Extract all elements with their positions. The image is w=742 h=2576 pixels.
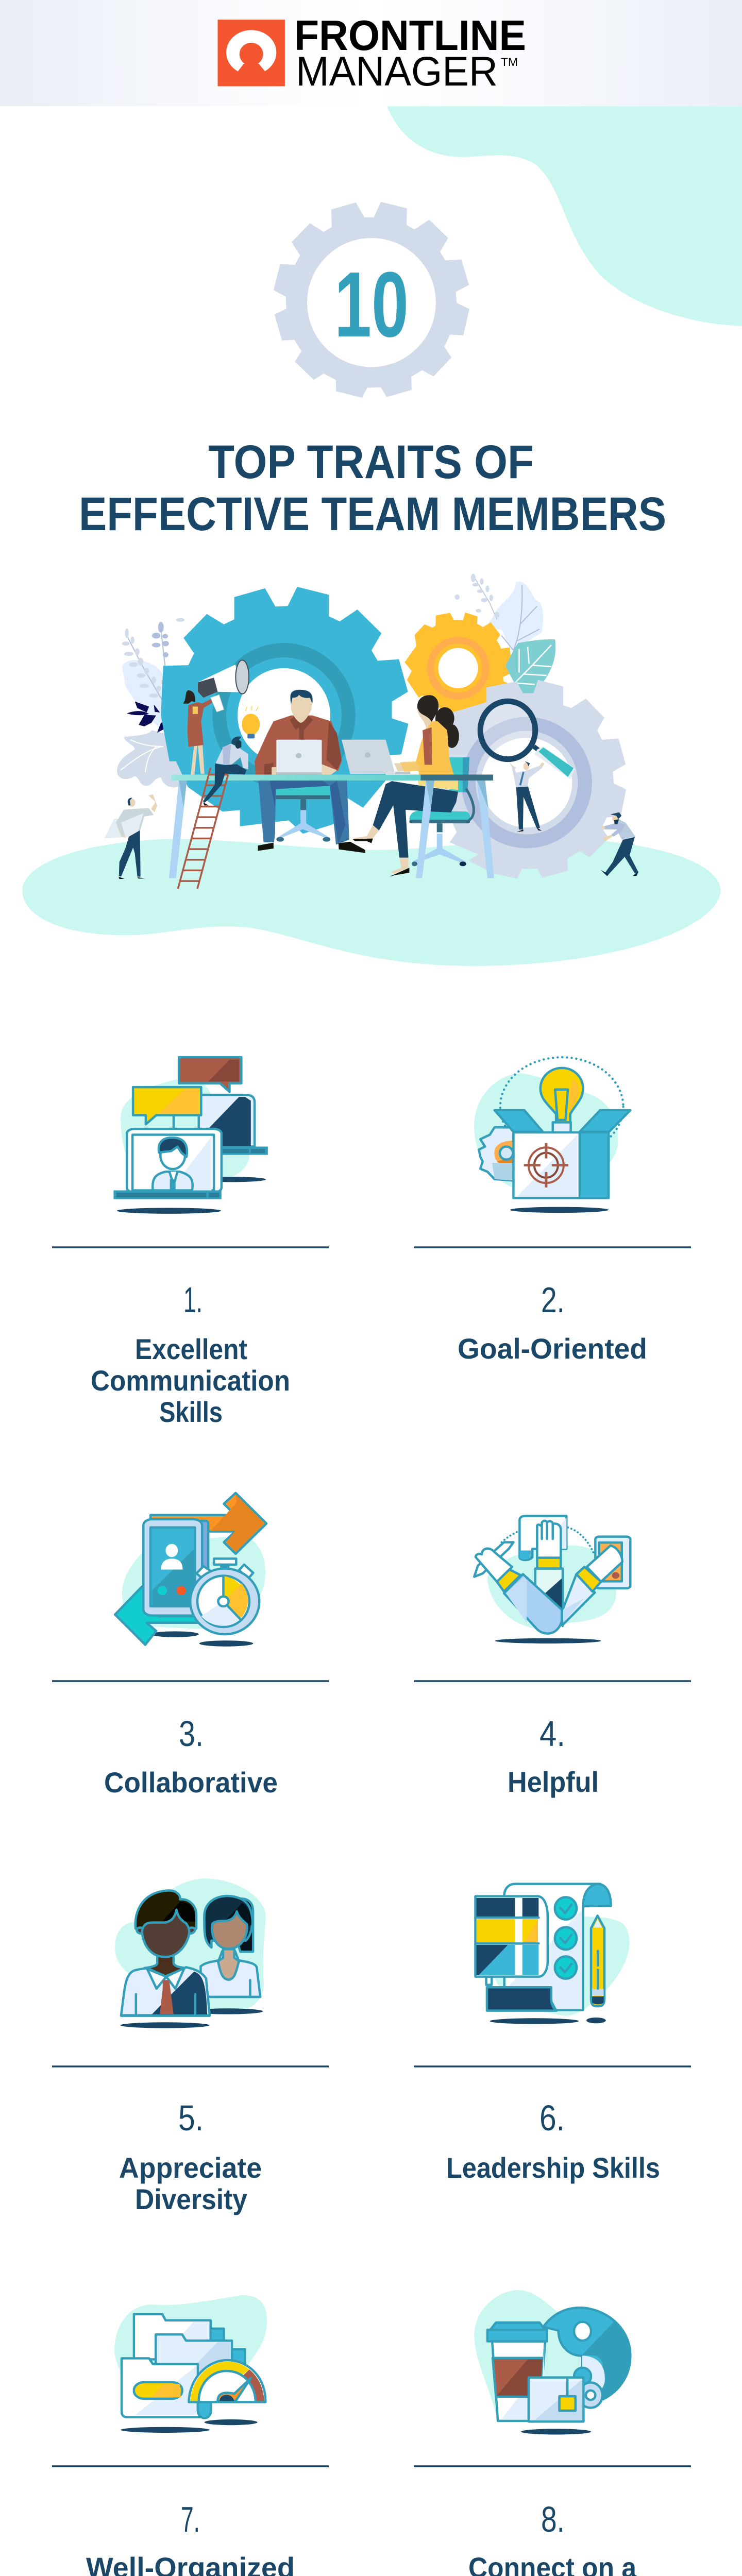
label: Helpful [508, 1766, 599, 1798]
divider [52, 1246, 329, 1248]
label [91, 1333, 290, 1428]
trait 4: helpful [414, 1516, 691, 1798]
number: 2. [541, 1280, 565, 1320]
header band with logo [0, 0, 742, 106]
desk [169, 774, 494, 878]
logo wordmark [294, 11, 526, 95]
icon: two colleagues [115, 1878, 266, 2028]
icon: coffee, mug and yin-yang [474, 2290, 630, 2434]
magnifying glass [480, 701, 575, 779]
number: 6. [539, 2098, 565, 2138]
icon: video call with speech bubbles [113, 1057, 268, 1214]
number: 4. [539, 1714, 565, 1754]
label [119, 2151, 262, 2215]
woman with megaphone [183, 690, 213, 774]
background blob: top right [387, 106, 742, 326]
divider [414, 1680, 691, 1682]
seated man [255, 690, 365, 853]
logo wordmark: FRONTLINE [294, 11, 526, 59]
label: Communication [91, 1364, 290, 1397]
trait 2: goal-oriented [414, 1057, 691, 1365]
trait 7: well-organized [52, 2295, 329, 2576]
blue gear [161, 587, 409, 834]
divider [414, 2465, 691, 2467]
gear badge with number 10 [274, 202, 469, 398]
divider [52, 2465, 329, 2467]
trait 6: leadership skills [414, 1884, 691, 2184]
title [79, 436, 666, 540]
label: Excellent [135, 1333, 247, 1365]
icon: phone, stopwatch and arrows [115, 1493, 266, 1647]
trait 3: collaborative [52, 1493, 329, 1799]
logo wordmark: TM [501, 56, 518, 69]
number: 5. [178, 2098, 204, 2138]
right foliage [455, 574, 543, 650]
number: 7. [181, 2499, 200, 2539]
trait 5: appreciate diversity [52, 1878, 329, 2215]
man's chair [276, 786, 330, 842]
laptops [276, 740, 410, 774]
icon: helping hands [474, 1516, 630, 1643]
divider [52, 2065, 329, 2067]
divider [52, 1680, 329, 1682]
divider [414, 1246, 691, 1248]
ground blob [22, 838, 721, 966]
number: 1. [183, 1280, 203, 1320]
label: Collaborative [104, 1766, 278, 1799]
light bulb [242, 706, 260, 738]
man with laptop, bottom left [105, 794, 157, 879]
divider [414, 2065, 691, 2067]
megaphone [198, 660, 249, 712]
man pushing gear [601, 812, 638, 876]
label: Diversity [135, 2183, 247, 2215]
icon: book, checklist and pencil [476, 1884, 630, 2024]
label: Leadership Skills [446, 2151, 660, 2184]
label: Skills [159, 1396, 223, 1428]
man under magnifier [509, 761, 545, 832]
trait 1: excellent communication skills [52, 1057, 329, 1428]
bearded man on the ladder [203, 737, 248, 805]
logo wordmark: MANAGER [296, 48, 498, 95]
title: EFFECTIVE TEAM MEMBERS [79, 488, 666, 540]
number: 8. [541, 2499, 565, 2539]
trait 8: connect on a personal level [414, 2290, 691, 2576]
title: TOP TRAITS OF [208, 436, 534, 488]
label: Appreciate [119, 2151, 262, 2184]
logo mark [217, 20, 285, 86]
icon: open box with bulb and target [474, 1057, 630, 1213]
icon: folders and gauge [114, 2295, 267, 2433]
number: 3. [179, 1714, 204, 1754]
hero illustration: team at a desk with gears [22, 574, 721, 966]
teal leaf [505, 639, 555, 696]
gear shape [274, 202, 469, 398]
grey gear [433, 680, 626, 879]
ladder [178, 768, 228, 889]
yellow gear [404, 613, 513, 713]
number 10: 10 [334, 253, 409, 357]
woman at laptop [352, 695, 459, 876]
left foliage [117, 618, 189, 788]
label: Goal-Oriented [458, 1332, 647, 1365]
woman's chair [409, 757, 474, 866]
